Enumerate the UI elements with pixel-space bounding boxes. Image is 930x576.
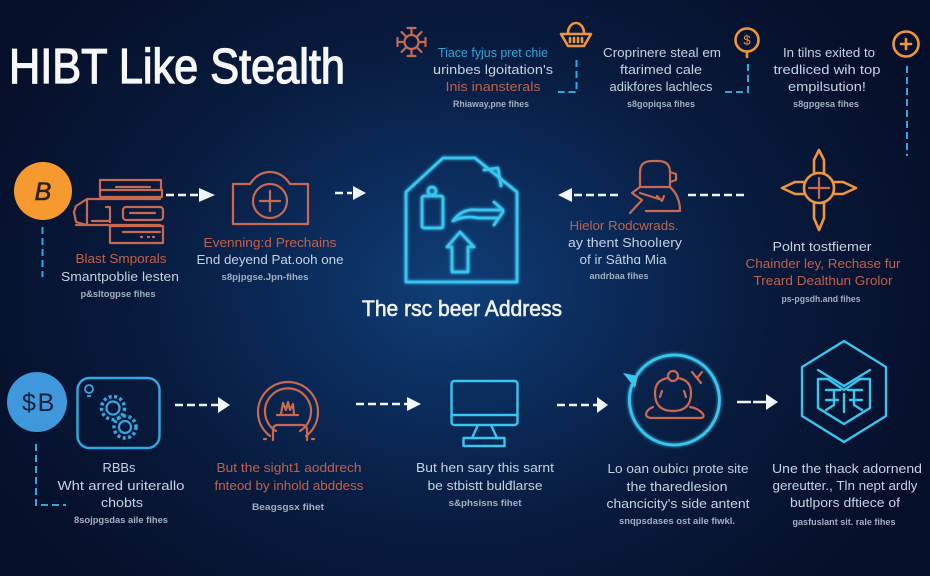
- connector: long dashed line: [906, 66, 908, 156]
- text: bottom step four: chancicity's side antent: [606, 496, 750, 511]
- text: bottom step five: [772, 461, 922, 527]
- panel: bottom step two: [214, 382, 421, 512]
- text: bottom step one: RBBs: [102, 460, 136, 475]
- text: bottom step four: [606, 461, 750, 526]
- text: bottom step five: Une the thack adornend: [772, 461, 922, 476]
- text: bottom step five: gasfuslant sit. rale fihes: [792, 517, 896, 527]
- text: middle step left two: Evenning:d Prechains: [204, 235, 337, 250]
- text: middle step right one: [568, 218, 683, 281]
- text: bottom step four: snqpsdases ost aile fiwkl.: [619, 516, 735, 526]
- icon: person: [630, 161, 680, 213]
- icon: plus circle: [894, 32, 918, 56]
- text: bottom step five: butlpors dftiece of: [790, 495, 900, 510]
- panel: central house address: [362, 158, 562, 321]
- arrow: person to house: [558, 188, 618, 202]
- text: top step 3: tredliced wih top: [774, 62, 880, 77]
- panel: top step 2: [558, 23, 721, 109]
- icon: house: [406, 158, 517, 282]
- text: middle step left two: End deyend Pat.ooh one: [196, 252, 344, 267]
- panel: bottom step three: [416, 381, 608, 508]
- text: middle step right two: [746, 239, 901, 304]
- text: bottom step one: 8sojpgsdas aile fihes: [74, 515, 168, 525]
- icon: blue badge: B: [38, 389, 54, 417]
- icon: hexagon shield: [802, 341, 886, 442]
- icon: orange badge: [14, 162, 72, 220]
- icon: gears box: [78, 378, 160, 448]
- icon: blue badge: [7, 372, 67, 432]
- text: bottom step three: But hen sary this sarnt: [416, 460, 554, 475]
- connector: dashed orange badge line: [42, 227, 44, 277]
- connector: dashes cross to person: [688, 194, 746, 196]
- icon: orange cross: [782, 150, 856, 230]
- arrow: arch to monitor: [356, 397, 421, 411]
- text: middle step right two: Chainder ley, Rechase fur: [746, 256, 901, 271]
- text: top step 2: ftarimed cale: [620, 62, 702, 77]
- icon: servers: [74, 180, 163, 243]
- connector: bracket one: [558, 60, 576, 92]
- arrow: monitor to circle: [557, 397, 608, 413]
- text: middle step right two: Treard Dealthun Grolor: [754, 273, 893, 288]
- text: top step 1: [433, 45, 554, 109]
- text: middle step left two: [196, 235, 344, 282]
- text: bottom step four: Lo oan oubicı prote site: [608, 461, 748, 476]
- text: bottom step two: Beagsgsx fihet: [252, 502, 324, 512]
- text: top step 3: s8gpgesa fihes: [793, 99, 859, 109]
- text: middle step right one: Hielor Rodcwrads.: [570, 218, 678, 233]
- text: top step 1: Inis inansterals: [446, 79, 541, 94]
- text: bottom step one: chobts: [101, 495, 144, 510]
- text: top step 2: adikfores lachlecs: [610, 79, 713, 94]
- text: bottom step three: be stbistt bulđlarse: [428, 478, 542, 493]
- text: middle step left one: Smantpoblie lesten: [61, 269, 179, 284]
- text: top step 1: Tiace fyjus pret chie: [438, 45, 548, 60]
- panel: middle step right two: [746, 150, 901, 304]
- panel: middle step left one: [14, 162, 215, 299]
- text: bottom step three: s&phsisns fihet: [448, 498, 522, 508]
- text: middle step right one: andrbaa fihes: [590, 271, 648, 281]
- icon: circular person: [623, 355, 719, 445]
- arrow: gears to arch: [175, 397, 230, 413]
- panel: middle step right one: [558, 161, 746, 281]
- panel: bottom step one: [7, 372, 230, 525]
- text: middle step right one: ay thent Shoolıery: [568, 235, 683, 250]
- icon: arch: [258, 382, 318, 440]
- panel: middle step left two: [196, 172, 366, 282]
- icon: dollar pin: [736, 28, 758, 57]
- text: middle step right one: of ir Sâthɑ Mia: [580, 252, 667, 267]
- arrow: circle to hexagon: [737, 394, 778, 410]
- text: bottom step three: [416, 460, 554, 508]
- text: bottom step one: [58, 460, 184, 525]
- text: bottom step five: gereutter., Tln nept ardly: [772, 478, 918, 493]
- connector: bracket two: [722, 64, 748, 92]
- text: bottom step two: [214, 460, 364, 512]
- icon: dollar pin: $: [743, 32, 751, 48]
- panel: bottom step five: [772, 341, 922, 527]
- heading: house label: The rsc beer Address: [362, 296, 562, 321]
- text: middle step left two: s8pjpgse.Jpn-fihes: [222, 272, 308, 282]
- text: bottom step one: Wht arred uriterallo: [58, 478, 184, 493]
- text: middle step left one: Blast Smporals: [76, 251, 167, 266]
- arrow: servers to camera: [166, 188, 215, 202]
- text: top step 1: urinbes lgoitation's: [433, 62, 554, 77]
- icon: basket: [561, 23, 591, 46]
- text: middle step left one: [61, 251, 179, 299]
- title: HIBT Like Stealth: [9, 40, 345, 94]
- icon: blue badge: $: [22, 389, 36, 417]
- text: middle step right two: ps-pgsdh.and fihes: [782, 294, 860, 304]
- text: top step 3: empilsution!: [788, 79, 866, 94]
- connector: elbow under blue badge: [36, 444, 66, 505]
- text: top step 2: Croprinere steal em: [603, 45, 721, 60]
- text: bottom step four: the tharedlesion: [626, 479, 728, 494]
- panel: bottom step four: [606, 355, 778, 526]
- text: top step 3: In tilns exited to: [783, 45, 875, 60]
- panel: top step 1: [398, 28, 554, 109]
- icon: monitor: [452, 381, 518, 446]
- text: bottom step two: But the sight1 aoddrech: [216, 460, 362, 475]
- panel: top step 3: [722, 28, 918, 156]
- arrow: camera to house: [335, 186, 366, 200]
- text: top step 2: s8gopiqsa fihes: [627, 99, 695, 109]
- text: top step 1: Rhiaway,pne fihes: [453, 99, 529, 109]
- text: middle step right two: Polnt tostfiemer: [772, 239, 872, 254]
- icon: orange badge: B: [35, 178, 51, 206]
- text: bottom step two: fnteod by inhold abddess: [214, 478, 364, 493]
- icon: camera plus: [233, 172, 308, 224]
- text: top step 2: [603, 45, 721, 109]
- icon: sun burst: [398, 28, 426, 56]
- text: top step 3: [774, 45, 880, 109]
- text: middle step left one: p&sltogpse fihes: [80, 289, 156, 299]
